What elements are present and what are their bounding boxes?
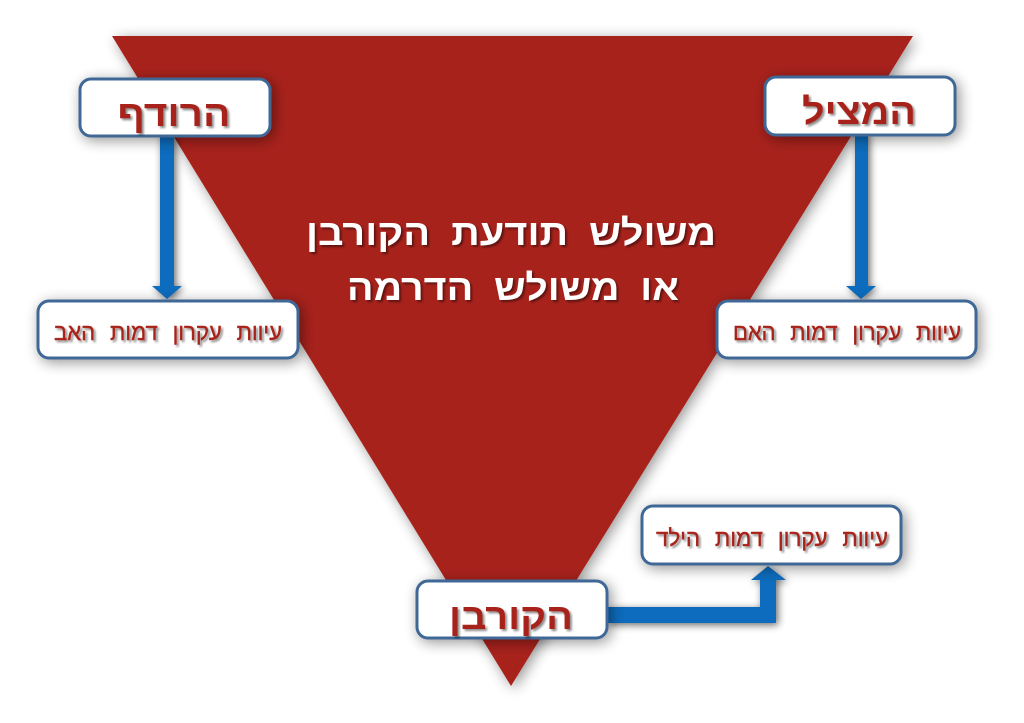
box: father image: [38, 301, 298, 358]
box: father image: עיוות עקרון דמות האב: [54, 319, 282, 345]
arrow: victim to child: [606, 566, 786, 623]
box: rescuer: [765, 77, 955, 135]
title: drama triangle: משולש תודעת הקורבן: [306, 212, 716, 253]
red inverted triangle: [112, 36, 913, 686]
box: persecutor: הרודף: [118, 93, 230, 134]
box: persecutor: [80, 79, 270, 136]
box: mother image: עיוות עקרון דמות האם: [733, 319, 961, 345]
arrow: rescuer to mother: [846, 133, 876, 299]
box: victim: [417, 581, 607, 638]
title: drama triangle: [306, 212, 716, 308]
box: mother image: [717, 301, 976, 358]
box: child image: [642, 506, 901, 564]
box: victim: הקורבן: [449, 596, 573, 637]
box: rescuer: המציל: [802, 91, 916, 132]
arrow: persecutor to father: [152, 133, 182, 299]
box: child image: עיוות עקרון דמות הילד: [656, 525, 888, 551]
title: drama triangle: או משולש הדרמה: [347, 267, 679, 308]
